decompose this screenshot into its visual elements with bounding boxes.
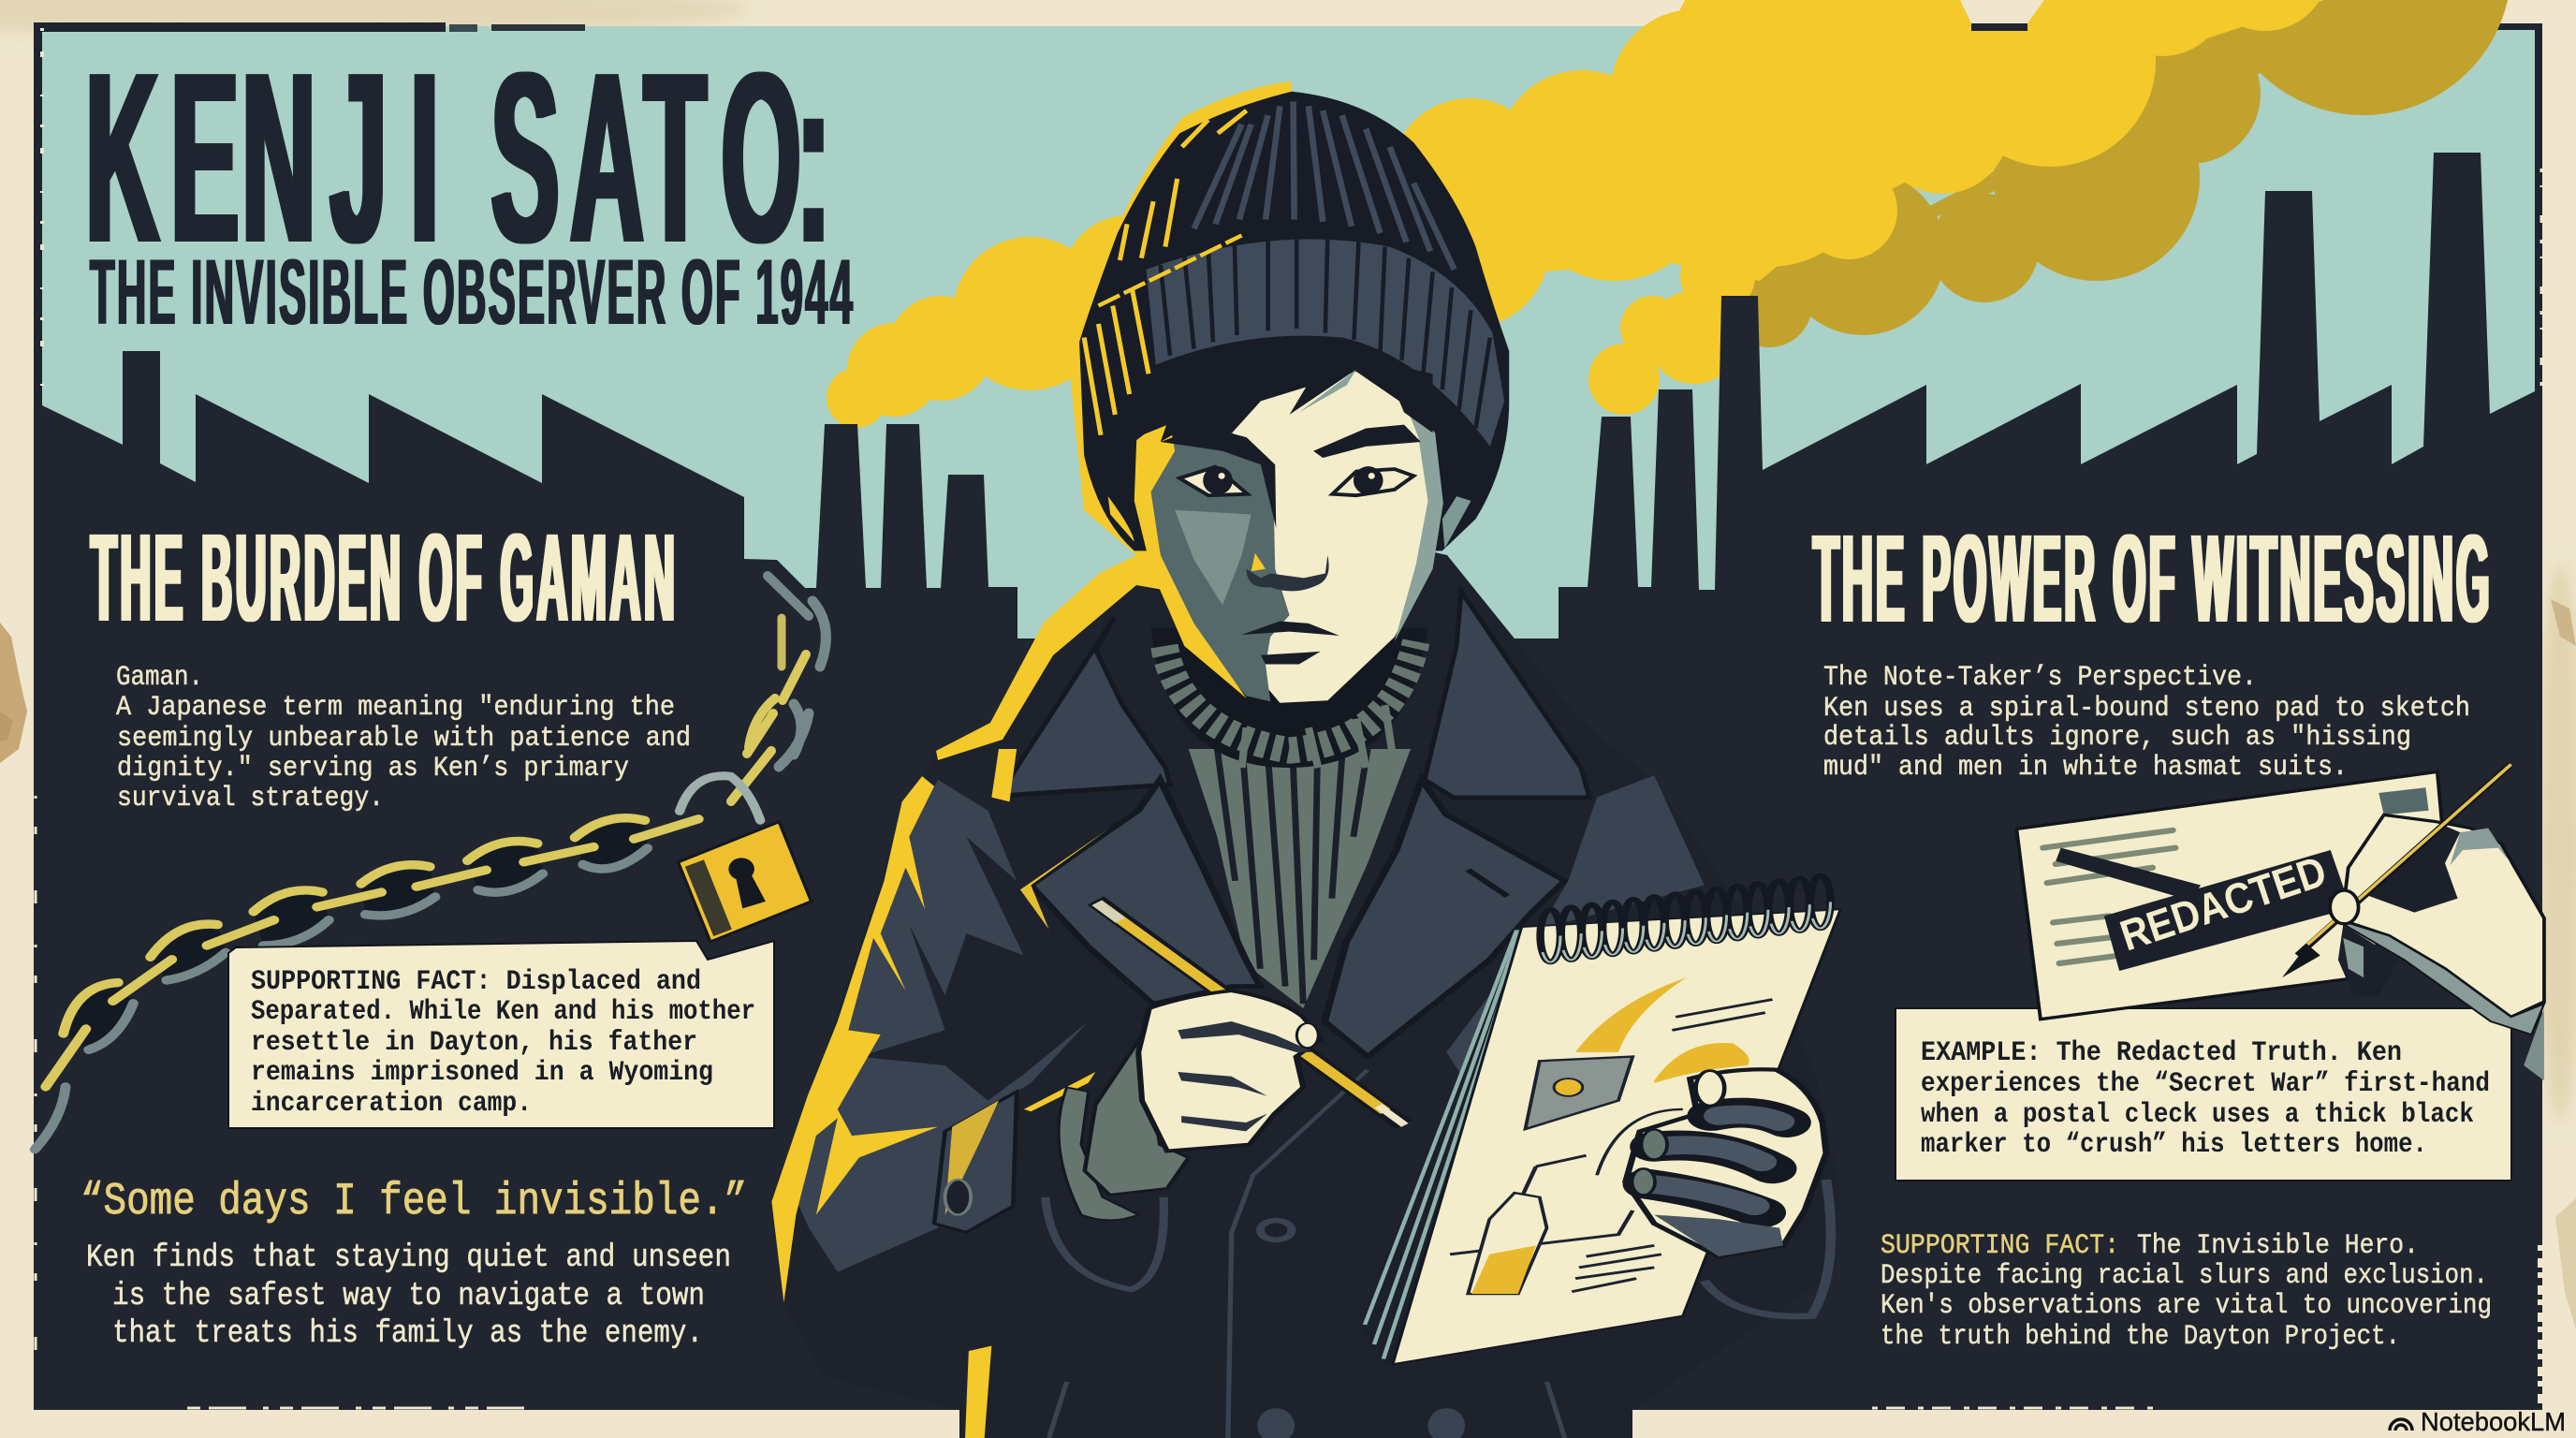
padlock shackle (680, 776, 760, 820)
note-taker text: mud" and men in white hasmat suits. (1823, 752, 2348, 784)
callout: example, the redacted truth: marker to “crush” his letters home. (1921, 1129, 2427, 1161)
supporting fact: the invisible hero: the truth behind the Dayton Project. (1881, 1321, 2400, 1353)
notepad spiral binding (1541, 875, 1831, 962)
gaman definition text: Gaman. (116, 662, 203, 694)
callout: supporting fact, displaced and separated: resettle in Dayton, his father (251, 1027, 697, 1059)
left lapel (1031, 780, 1260, 1004)
yellow glow around hat (1093, 90, 1292, 374)
redaction bar (2104, 850, 2346, 971)
quote explanation text: Ken finds that staying quiet and unseen (86, 1240, 731, 1276)
worn poster edges (36, 796, 2540, 1408)
callout: supporting fact, displaced and separated: Separated. While Ken and his mother (251, 996, 755, 1028)
coat silhouette (773, 524, 1840, 1438)
quote explanation text (86, 1240, 731, 1352)
upper collar left (1002, 618, 1170, 796)
quote explanation text: that treats his family as the enemy. (112, 1316, 703, 1352)
yellow rim light on hat (1084, 110, 1247, 435)
illustration: boy with notebook (771, 90, 1840, 1438)
left hand (1138, 990, 1321, 1152)
callout: example, the redacted truth: EXAMPLE: The Redacted Truth. Ken (1921, 1037, 2402, 1069)
upper chain links (731, 559, 826, 801)
marker strike (2056, 848, 2201, 901)
face shadow side (1151, 433, 1290, 701)
smoke plume: bright yellow layer (827, 0, 2329, 428)
padlock body (678, 822, 812, 942)
poster dark frame strokes (34, 22, 2542, 524)
section heading: the burden of gaman: THE BURDEN OF GAMAN (91, 507, 675, 648)
pencil (1095, 901, 1403, 1124)
brows (1161, 426, 1276, 528)
sleeve shadow jags (859, 837, 1089, 1101)
placket and buttons (1228, 1070, 1368, 1438)
sketch on notepad (1450, 977, 1773, 1294)
hat and hair silhouette (1079, 92, 1509, 550)
yellow glow behind shoulder (936, 374, 1217, 760)
callout: supporting fact, displaced and separated: remains imprisoned in a Wyoming (251, 1057, 713, 1089)
lower chain links (35, 818, 698, 1150)
callout: supporting fact, displaced and separated: incarceration camp. (251, 1088, 532, 1120)
subtitle: THE INVISIBLE OBSERVER OF 1944 (90, 242, 853, 345)
hair bangs (1134, 338, 1433, 442)
notepad page stack (1360, 927, 1529, 1364)
callout: supporting fact, displaced and separated (228, 941, 774, 1128)
turtleneck body (1189, 749, 1411, 1008)
left sleeve (791, 780, 1089, 1272)
right lapel (1325, 780, 1565, 1057)
quote: “Some days I feel invisible.” (80, 1177, 747, 1227)
ears (1108, 496, 1134, 542)
pen (2297, 764, 2511, 956)
cuff (934, 1092, 1017, 1232)
quote explanation text: is the safest way to navigate a town (112, 1279, 705, 1314)
writing hand (2331, 814, 2544, 1017)
hat crown ribs (1194, 101, 1455, 270)
title: KENJI SATO: (85, 22, 830, 294)
supporting fact: the invisible hero: Despite facing racial slurs and exclusion. (1881, 1260, 2488, 1292)
left hand shadow side (1085, 1030, 1189, 1195)
eyes (1179, 467, 1248, 495)
note-taker text: Ken uses a spiral-bound steno pad to sketch (1823, 693, 2470, 725)
smoke plume: mustard shadow layer (1726, 0, 2511, 347)
nose and mouth (1251, 553, 1266, 571)
gap in smoke showing paper and frame (1960, 0, 2044, 31)
notepad page (1393, 909, 1840, 1364)
coat panels, sleeve, lapels, hand, pad (771, 749, 1840, 1438)
supporting fact: the invisible hero: The Invisible Hero. (2137, 1230, 2419, 1262)
gaman definition text: seemingly unbearable with patience and (117, 723, 691, 755)
right shoulder (1540, 775, 1705, 929)
face teal edge (1395, 394, 1443, 641)
envelope (2016, 771, 2442, 1020)
callout: supporting fact, displaced and separated: SUPPORTING FACT: Displaced and (251, 966, 701, 998)
gaman definition text: dignity." serving as Ken’s primary (117, 753, 629, 785)
chain with padlock (35, 559, 826, 1150)
supporting fact: the invisible hero: SUPPORTING FACT: (1881, 1230, 2119, 1262)
callout: example, the redacted truth (1895, 1008, 2511, 1181)
yellow coat hem (965, 1345, 991, 1438)
gaman definition text: A Japanese term meaning "enduring the (116, 692, 675, 724)
callout: example, the redacted truth: when a postal cleck uses a thick black (1921, 1099, 2474, 1131)
note-taker text: details adults ignore, such as "hissing (1823, 722, 2411, 754)
supporting fact: the invisible hero: Ken's observations are vital to uncovering (1881, 1290, 2492, 1322)
ribbed wrist (1059, 1087, 1138, 1220)
note-taker text (1823, 662, 2470, 784)
gaman definition text: survival strategy. (117, 783, 384, 814)
section heading: the power of witnessing: THE POWER OF WITNESSING (1813, 508, 2489, 649)
turtleneck collar (1151, 628, 1428, 768)
sleeve yellow rim light (771, 776, 938, 1302)
poster sky panel (34, 26, 2542, 663)
supporting fact: the invisible hero (1881, 1230, 2492, 1353)
upper collar right (1425, 592, 1589, 798)
notebooklm watermark: NotebookLM (2421, 1407, 2566, 1436)
envelope with redaction and hand: REDACTED (2115, 846, 2332, 960)
lower sleeve folds (1046, 1197, 1164, 1289)
face light side (1232, 372, 1442, 703)
head and hat (1079, 90, 1509, 768)
face yellow side light (1134, 424, 1247, 698)
hat brim band (1146, 239, 1504, 447)
gaman definition text (116, 662, 691, 814)
note-taker text: The Note-Taker’s Perspective. (1823, 662, 2257, 694)
envelope with redaction and hand (2016, 764, 2544, 1080)
right hand holding notepad (1626, 1069, 1826, 1256)
callout: example, the redacted truth: experiences the “Secret War” first-hand (1921, 1068, 2490, 1100)
